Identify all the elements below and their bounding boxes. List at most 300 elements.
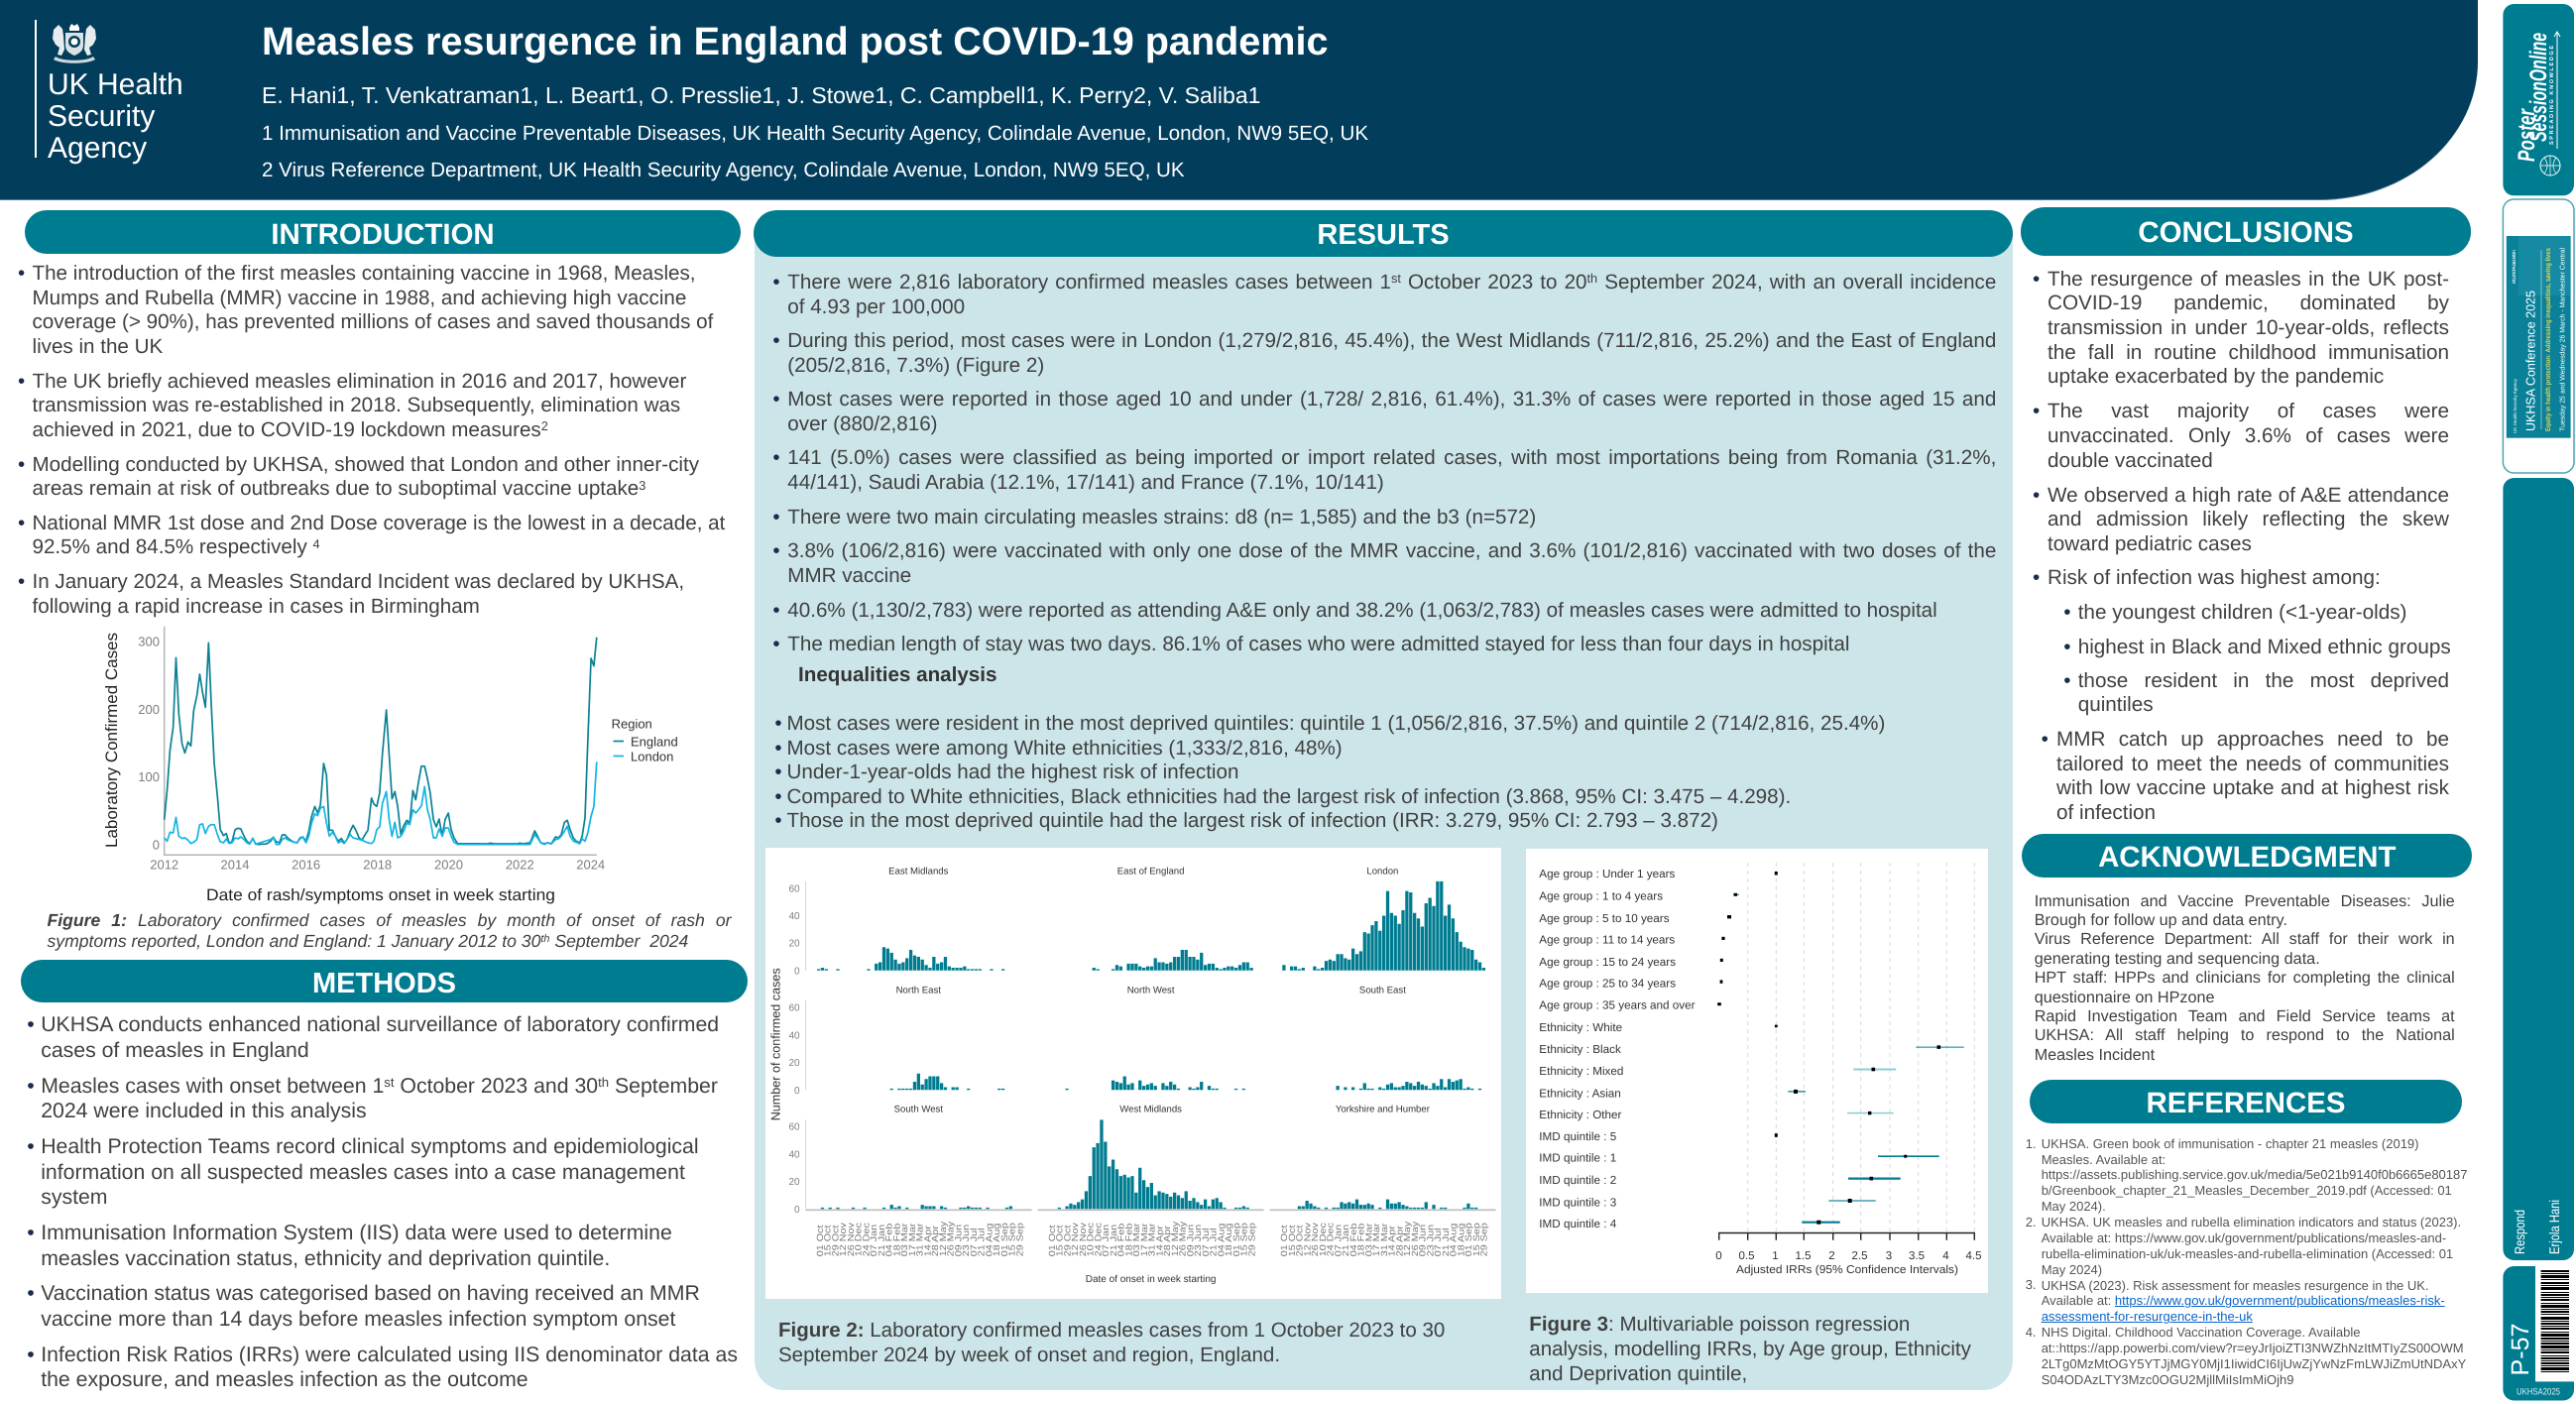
- x axis ticks: 2024: [576, 857, 605, 873]
- row labels: Ethnicity : Black: [1539, 1043, 1621, 1056]
- facet titles: North West: [1127, 985, 1175, 995]
- y axis ticks: 0: [794, 966, 800, 977]
- row labels: IMD quintile : 4: [1539, 1218, 1617, 1230]
- text: introduction bullet 2: achieved in 2021, due to COVID-19 lockdown measures2: [32, 418, 548, 441]
- text: conclusions bullet 1: uptake exacerbated by the pandemic: [2048, 365, 2384, 388]
- chart: figure 1 line chart: [102, 627, 678, 904]
- x axis labels: column 2: 01 Sep: [1231, 1223, 1241, 1256]
- text: results bullet 3: over (880/2,816): [787, 412, 938, 435]
- text: methods bullet 6: the exposure, and measles infection as the outcome: [41, 1367, 528, 1391]
- text: conclusions sub-bullet 3: quintiles: [2078, 693, 2154, 716]
- facet titles: South West: [894, 1104, 944, 1114]
- text: conclusions bullet 2: The vast majority of cases were: [2048, 400, 2449, 422]
- line series: England and London: [165, 638, 597, 845]
- panel: results: •: [774, 785, 782, 808]
- x axis labels: column 2: 07 Jul: [1201, 1228, 1211, 1256]
- panel: results: •: [772, 633, 780, 655]
- x axis labels: column 3: 26 May: [1410, 1221, 1420, 1256]
- confidence intervals: [1733, 894, 1964, 1223]
- panel: poster id and barcode: [2503, 1266, 2574, 1400]
- x axis labels: column 2: 04 Aug: [1217, 1223, 1227, 1256]
- figure 2 caption: Figure 2: Laboratory confirmed measles cases from 1 October 2023 to 30: [778, 1319, 1445, 1342]
- y axis ticks: 40: [789, 1149, 800, 1160]
- text: acknowledgment: HPT staff: HPPs and clinicians for completing the clinical: [2035, 969, 2455, 987]
- panel: presenter strip: [2503, 478, 2574, 1260]
- heading: conclusions: CONCLUSIONS: [2138, 216, 2354, 249]
- x axis labels: column 3: 07 Jul: [1433, 1228, 1443, 1256]
- x axis tick labels: 1.5: [1795, 1250, 1811, 1262]
- text: acknowledgment: generating testing and sequencing data.: [2035, 950, 2320, 968]
- text: methods bullet 5: vaccine more than 14 days before measles infection symptom onset: [41, 1307, 675, 1331]
- text: conclusions sub-bullet 2: highest in Black and Mixed ethnic groups: [2078, 635, 2451, 658]
- panel: results: [754, 210, 2013, 1390]
- text: methods bullet 5: [27, 1281, 700, 1331]
- x axis labels: column 2: 18 Feb: [1124, 1223, 1134, 1256]
- text: methods bullet 3: Health Protection Teams record clinical symptoms and epidemiological: [41, 1134, 699, 1158]
- x axis labels: column 2: 15 Sep: [1239, 1223, 1249, 1256]
- text: reference numbers: 1.: [2026, 1136, 2037, 1151]
- x axis labels: column 2: 29 Oct: [1063, 1225, 1073, 1256]
- text: conclusions bullet 5: [2042, 728, 2449, 824]
- panel: introduction: •: [18, 370, 25, 393]
- y axis ticks: 20: [789, 1177, 800, 1188]
- y axis ticks: [138, 635, 160, 853]
- figure 3 caption: analysis, modelling IRRs, by Age group, Ethnicity: [1529, 1338, 1971, 1360]
- x axis labels: column 3: 23 Jun: [1426, 1225, 1436, 1256]
- facet titles: East of England: [1117, 866, 1185, 877]
- x axis labels: column 1: 01 Oct: [815, 1225, 825, 1256]
- text: methods bullet 1: cases of measles in England: [41, 1038, 309, 1062]
- x axis ticks: 2018: [363, 857, 392, 873]
- text: introduction bullet 1: The introduction of the first measles containing vaccine in 1968, Measles,: [32, 262, 696, 285]
- row labels: Ethnicity : Asian: [1539, 1087, 1621, 1101]
- text: results bullet 8: The median length of stay was two days. 86.1% of cases who were admitted stayed for less than four days in hospital: [787, 633, 1849, 655]
- x axis labels: column 2: 31 Mar: [1147, 1223, 1157, 1256]
- x axis labels: column 1: 04 Aug: [985, 1223, 995, 1256]
- affiliation 1: 1 Immunisation and Vaccine Preventable Diseases, UK Health Security Agency, Colindale Avenue, London, NW9 5EQ, UK: [262, 121, 1368, 145]
- panel: poster id and barcode: P-57: [2507, 1323, 2534, 1376]
- x axis labels: column 3: 29 Oct: [1295, 1225, 1305, 1256]
- x axis labels: column 2: 04 Feb: [1116, 1223, 1126, 1256]
- affiliation 2: 2 Virus Reference Department, UK Health Security Agency, Colindale Avenue, London, NW9 5EQ, UK: [262, 159, 1185, 180]
- panel: results: •: [774, 737, 782, 760]
- x axis labels: column 3: 17 Mar: [1371, 1223, 1381, 1256]
- text: results bullet 4: 141 (5.0%) cases were classified as being imported or import related cases, with most importations being from Romania (31.2%,: [787, 446, 1996, 469]
- row labels: Age group : 5 to 10 years: [1539, 912, 1670, 925]
- facet titles: East Midlands: [889, 866, 949, 877]
- panel: results: •: [774, 712, 782, 735]
- panel: methods: •: [27, 1134, 35, 1158]
- text: methods bullet 2: 2024 were included in this analysis: [41, 1099, 367, 1122]
- text: references list: b/Greenbook_chapter_21_Measles_December_2019.pdf (Accessed: 01: [2042, 1183, 2452, 1198]
- row labels: Age group : 15 to 24 years: [1539, 956, 1676, 969]
- text: inequalities bullets: Most cases were among White ethnicities (1,333/2,816, 48%): [787, 737, 1343, 760]
- text: introduction bullet 5: In January 2024, a Measles Standard Incident was declared by UKHSA,: [32, 570, 684, 593]
- panel: results: •: [772, 446, 780, 469]
- row labels: Ethnicity : Mixed: [1539, 1065, 1623, 1078]
- x axis labels: column 1: 01 Sep: [999, 1223, 1009, 1256]
- facet titles: [889, 866, 1431, 1114]
- text: introduction bullet 3: Modelling conducted by UKHSA, showed that London and other inner-city: [32, 453, 699, 476]
- heading: introduction: INTRODUCTION: [271, 218, 495, 251]
- text: acknowledgment: Measles Incident: [2035, 1046, 2155, 1064]
- panel: conclusions: •: [2063, 635, 2071, 658]
- x axis ticks: 2020: [434, 857, 463, 873]
- text: references list: Available at: https://www.gov.uk/government/publications/measles-risk-: [2042, 1293, 2445, 1308]
- text: results bullet 4: [772, 446, 1996, 494]
- bars: North East: [892, 1073, 1003, 1090]
- text: acknowledgment: Rapid Investigation Team and Field Service teams at: [2035, 1007, 2455, 1025]
- text: results bullet 2: (205/2,816, 7.3%) (Figure 2): [787, 354, 1044, 377]
- y axis ticks: 40: [789, 911, 800, 922]
- panel: results: •: [772, 599, 780, 621]
- panel: methods: •: [27, 1343, 35, 1366]
- text: acknowledgment: Virus Reference Department: All staff for their work in: [2035, 930, 2455, 948]
- subheading: inequalities analysis: Inequalities analysis: [798, 663, 996, 686]
- text: reference numbers: 3.: [2026, 1277, 2037, 1292]
- y axis ticks: 20: [789, 1058, 800, 1069]
- x axis labels: column 3: 07 Jan: [1334, 1225, 1344, 1256]
- figure 2 caption: [778, 1319, 1445, 1366]
- text: results bullet 6: 3.8% (106/2,816) were vaccinated with only one dose of the MMR vaccine, and 3.6% (101/2,816) vaccinated with two doses of the: [787, 539, 1996, 562]
- text: results bullet 1: There were 2,816 laboratory confirmed measles cases between 1st October 2023 to 20th September 2024, with an overall incidence: [787, 271, 1996, 293]
- bars: West Midlands: [1060, 1119, 1248, 1209]
- x axis labels: column 1: 12 May: [938, 1221, 948, 1256]
- text: introduction bullet 2: [18, 370, 686, 441]
- x axis labels: column 2: 17 Mar: [1139, 1223, 1149, 1256]
- panel: Poster Session Online logo: [2503, 4, 2574, 195]
- x axis labels: column 1: 21 Jan: [877, 1225, 886, 1256]
- text: conclusions bullet 3: [2033, 484, 2449, 555]
- x axis labels: column 3: 04 Feb: [1348, 1223, 1358, 1256]
- logo: UK Health Security Agency: [35, 20, 195, 158]
- title: Measles resurgence in England post COVID-19 pandemic: [262, 20, 1329, 63]
- x axis labels: column 1: [815, 1221, 1025, 1256]
- row labels: Age group : 11 to 14 years: [1539, 934, 1675, 947]
- x axis title: Date of rash/symptoms onset in week starting: [206, 885, 555, 904]
- x axis labels: column 3: 03 Mar: [1364, 1223, 1374, 1256]
- text: results bullet 1: [772, 271, 1996, 318]
- text: introduction bullet 2: The UK briefly achieved measles elimination in 2016 and 2017, however: [32, 370, 686, 393]
- text: conclusions bullet 5: of infection: [2056, 801, 2156, 824]
- panel: results: •: [774, 760, 782, 783]
- text: conclusions bullet 5: MMR catch up approaches need to be: [2056, 728, 2449, 751]
- text: conclusions sub-bullet 3: those resident in the most deprived: [2078, 669, 2449, 692]
- text: conclusions bullet 4: Risk of infection was highest among:: [2048, 566, 2381, 589]
- x axis labels: column 2: 01 Oct: [1047, 1225, 1057, 1256]
- text: introduction bullet 4: National MMR 1st dose and 2nd Dose coverage is the lowest in a decade, at: [32, 512, 725, 534]
- text: introduction bullet 2: transmission was re-established in 2018. Subsequently, elimination was: [32, 394, 680, 416]
- panel: introduction: •: [18, 570, 25, 593]
- text: conclusions sub-bullet 1: the youngest children (<1-year-olds): [2078, 601, 2406, 624]
- x axis labels: column 2: 12 May: [1170, 1221, 1180, 1256]
- text: reference numbers: 2.: [2026, 1215, 2037, 1229]
- x axis tick labels: 4.5: [1965, 1250, 1981, 1262]
- row labels: IMD quintile : 2: [1539, 1174, 1616, 1187]
- panel: methods: •: [27, 1281, 35, 1305]
- panel: conclusions: •: [2063, 669, 2071, 692]
- x axis labels: column 1: 17 Mar: [907, 1223, 917, 1256]
- x axis labels: column 2: 03 Mar: [1132, 1223, 1142, 1256]
- panel: Poster Session Online logo: SPREADING KNOWLEDGE: [2549, 46, 2555, 145]
- text: methods bullet 3: [27, 1134, 699, 1209]
- text: introduction bullet 1: coverage (> 90%), has prevented millions of cases and saved thousands of: [32, 310, 713, 333]
- text: conclusions bullet 2: [2033, 400, 2449, 472]
- x axis tick labels: 0.5: [1739, 1250, 1755, 1262]
- bars: South West: [823, 1205, 1011, 1209]
- facet titles: London: [1367, 866, 1399, 877]
- heading: methods: METHODS: [312, 968, 456, 999]
- text: methods bullet 1: UKHSA conducts enhanced national surveillance of laboratory confirmed: [41, 1012, 719, 1036]
- x axis labels: column 3: 18 Feb: [1356, 1223, 1366, 1256]
- text: results bullet 1: of 4.93 per 100,000: [787, 295, 965, 318]
- y axis ticks: 0: [794, 1204, 800, 1215]
- text: introduction bullet 3: [18, 453, 699, 500]
- legend: Region: [612, 716, 652, 732]
- x axis: [1719, 1233, 1974, 1240]
- x axis labels: column 1: 28 Apr: [931, 1226, 941, 1256]
- x axis labels: column 3: 01 Sep: [1464, 1223, 1473, 1256]
- panel: methods: •: [27, 1012, 35, 1036]
- chart: figure 3 forest plot: [1526, 849, 1988, 1293]
- x axis labels: column 2: 15 Oct: [1055, 1225, 1065, 1256]
- x axis labels: column 1: 14 Apr: [923, 1226, 933, 1256]
- text: reference numbers: [2026, 1136, 2040, 1341]
- bars: North West: [1067, 1076, 1244, 1090]
- panel: references: [2013, 1076, 2479, 1391]
- x axis labels: column 1: 29 Sep: [1015, 1223, 1025, 1256]
- logo wordmark: Agency: [48, 132, 147, 165]
- x axis labels: column 3: 04 Aug: [1449, 1223, 1459, 1256]
- text: methods bullet 2: Measles cases with onset between 1st October 2023 and 30th September: [41, 1074, 718, 1098]
- x axis labels: column 3: 12 Nov: [1303, 1222, 1313, 1256]
- legend: London: [631, 750, 673, 763]
- text: conclusions bullet 3: toward pediatric cases: [2048, 532, 2252, 555]
- text: results bullet 2: During this period, most cases were in London (1,279/2,816, 45.4%), the West Midlands (711/2,816, 25.2%) and the East of England: [787, 329, 1996, 352]
- x axis labels: column 3: 24 Dec: [1326, 1222, 1336, 1256]
- text: conclusions bullet 1: [2033, 268, 2449, 388]
- x axis tick labels: 3.5: [1909, 1250, 1925, 1262]
- panel: methods: •: [27, 1074, 35, 1098]
- text: conclusions bullet 5: with low vaccine uptake and at highest risk: [2056, 776, 2449, 799]
- chart: figure 2 regional bar charts: [765, 848, 1501, 1299]
- x axis tick labels: 3: [1886, 1250, 1892, 1262]
- logo wordmark: Security: [48, 100, 155, 133]
- panel: results: •: [772, 539, 780, 562]
- panel: presenter strip: Erjola Hani: [2546, 1200, 2562, 1254]
- text: methods bullet 4: Immunisation Information System (IIS) data were used to determine: [41, 1221, 672, 1244]
- text: conclusions bullet 1: The resurgence of measles in the UK post-: [2048, 268, 2449, 291]
- text: references list: rubella-elimination-uk/uk-measles-and-rubella-elimination (Accessed: 01: [2042, 1246, 2453, 1261]
- panel: methods: •: [27, 1221, 35, 1244]
- text: introduction bullet 1: lives in the UK: [32, 335, 163, 358]
- panel: conclusions: •: [2033, 566, 2040, 589]
- text: methods bullet 6: [27, 1343, 738, 1391]
- heading: acknowledgment: [2022, 834, 2472, 878]
- x axis labels: column 3: 21 Jul: [1441, 1228, 1451, 1256]
- x axis labels: column 3: 01 Oct: [1279, 1225, 1289, 1256]
- x axis labels: column 1: 23 Jun: [962, 1225, 972, 1256]
- x axis labels: column 2: 29 Sep: [1247, 1223, 1257, 1256]
- panel: UKHSA Conference 2025 banner: UKHSA Conference 2025: [2524, 291, 2538, 431]
- x axis labels: column 2: 26 May: [1178, 1221, 1188, 1256]
- panel: results: •: [772, 506, 780, 527]
- row labels: Age group : 25 to 34 years: [1539, 977, 1676, 990]
- x axis labels: column 2: 10 Dec: [1086, 1222, 1096, 1256]
- row labels: Age group : 35 years and over: [1539, 999, 1696, 1012]
- x axis labels: column 1: 21 Jul: [977, 1228, 987, 1256]
- authors: E. Hani1, T. Venkatraman1, L. Beart1, O. Presslie1, J. Stowe1, C. Campbell1, K. Perry2, V. Saliba1: [262, 82, 1260, 108]
- facet titles: Yorkshire and Humber: [1336, 1104, 1431, 1114]
- text: methods bullet 2: [27, 1074, 718, 1122]
- panel: results: •: [772, 329, 780, 352]
- text: references list: May 2024).: [2042, 1199, 2106, 1214]
- x axis labels: column 3: 26 Nov: [1310, 1222, 1320, 1256]
- x axis labels: column 3: 14 Apr: [1387, 1226, 1397, 1256]
- panel: conclusions: •: [2033, 400, 2040, 422]
- sidebar: poster session strip: [2499, 0, 2576, 1404]
- heading: results: RESULTS: [1317, 219, 1450, 251]
- facet titles: North East: [896, 985, 942, 995]
- header banner: [0, 0, 2478, 200]
- x axis title: Date of onset in week starting: [1086, 1273, 1217, 1284]
- heading: introduction: [25, 210, 741, 254]
- x axis labels: column 2: 18 Aug: [1225, 1223, 1234, 1256]
- text: references list: NHS Digital. Childhood Vaccination Coverage. Available: [2042, 1325, 2361, 1340]
- text: references list: Available at: https://www.gov.uk/government/publications/measles-and-: [2042, 1230, 2446, 1245]
- panel: UKHSA Conference 2025 banner: UK Health Security Agency: [2513, 378, 2517, 433]
- text: introduction bullet 5: following a rapid increase in cases in Birmingham: [32, 595, 480, 618]
- y axis ticks: 200: [138, 702, 160, 717]
- text: references list: assessment-for-resurgence-in-the-uk: [2042, 1309, 2253, 1324]
- x axis tick labels: 0: [1715, 1250, 1722, 1262]
- text: introduction bullet 4: 92.5% and 84.5% respectively 4: [32, 535, 320, 558]
- y axis ticks: 60: [789, 883, 800, 894]
- y axis ticks: 60: [789, 1002, 800, 1013]
- x axis labels: column 2: 09 Jun: [1186, 1225, 1196, 1256]
- x axis labels: column 3: [1279, 1221, 1489, 1256]
- row labels: IMD quintile : 1: [1539, 1152, 1616, 1164]
- x axis labels: column 1: 29 Oct: [831, 1225, 841, 1256]
- x axis ticks: 2016: [292, 857, 320, 873]
- text: results bullet 3: Most cases were reported in those aged 10 and under (1,728/ 2,816, 61.4%), 31.3% of cases were reported in those aged 15 and: [787, 388, 1996, 410]
- row labels: Ethnicity : White: [1539, 1021, 1622, 1034]
- figure 1 caption: symptoms reported, London and England: 1 January 2012 to 30th September 2024: [48, 930, 688, 950]
- x axis ticks: [150, 857, 605, 873]
- panel: UKHSA Conference 2025 banner: [2503, 199, 2574, 473]
- text: references list: May 2024): [2042, 1262, 2102, 1277]
- text: references list: S04ODAzLTY3Mzc0OGU2MjllMiIsImMiOjh9: [2042, 1372, 2293, 1387]
- x axis labels: column 2: 12 Nov: [1071, 1222, 1081, 1256]
- heading: results: [754, 210, 2013, 257]
- text: results bullet 4: 44/141), Saudi Arabia (12.1%, 17/141) and France (7.1%, 10/141): [787, 471, 1384, 494]
- text: references list: [2042, 1136, 2467, 1388]
- x axis tick labels: [1715, 1250, 1981, 1262]
- text: conclusions bullet 1: COVID-19 pandemic, dominated by: [2048, 292, 2449, 314]
- text: results bullet 7: 40.6% (1,130/2,783) were reported as attending A&E only and 38.2% (1,063/2,783) of measles cases were admitted to hospital: [787, 599, 1937, 621]
- figure 3 caption: Figure 3: Multivariable poisson regression: [1529, 1313, 1910, 1336]
- x axis labels: column 3: 28 Apr: [1395, 1226, 1405, 1256]
- row labels: IMD quintile : 5: [1539, 1130, 1617, 1143]
- facet titles: West Midlands: [1120, 1104, 1183, 1114]
- text: introduction bullet 1: [18, 262, 714, 358]
- x axis labels: column 1: 18 Aug: [993, 1223, 1002, 1256]
- text: conclusions bullet 5: tailored to meet the needs of communities: [2056, 753, 2449, 775]
- legend: [612, 716, 678, 763]
- x axis labels: column 2: 21 Jul: [1209, 1228, 1219, 1256]
- panel: introduction: •: [18, 262, 25, 285]
- x axis labels: column 3: 12 May: [1402, 1221, 1412, 1256]
- facet titles: South East: [1359, 985, 1407, 995]
- text: methods bullet 3: system: [41, 1185, 107, 1209]
- x axis labels: column 2: 21 Jan: [1109, 1225, 1118, 1256]
- text: references list: https://assets.publishing.service.gov.uk/media/5e021b9140f0b6665e80187: [2042, 1167, 2467, 1182]
- panel: results: •: [772, 388, 780, 410]
- text: introduction bullet 4: [18, 512, 726, 558]
- x axis labels: column 3: 10 Dec: [1318, 1222, 1328, 1256]
- x axis labels: column 1: 24 Dec: [862, 1222, 872, 1256]
- x axis labels: column 1: 26 Nov: [846, 1222, 856, 1256]
- text: references list: UKHSA. UK measles and rubella elimination indicators and status (2023).: [2042, 1215, 2461, 1229]
- x axis labels: column 2: 07 Jan: [1102, 1225, 1112, 1256]
- bars: East Midlands: [819, 947, 1003, 970]
- panel: introduction: •: [18, 453, 25, 476]
- x axis tick labels: 2.5: [1852, 1250, 1868, 1262]
- text: conclusions bullet 1: transmission in under 10-year-olds, reflects: [2048, 316, 2449, 339]
- y axis title: Number of confirmed cases: [769, 968, 783, 1120]
- text: introduction bullet 1: Mumps and Rubella (MMR) vaccine in 1988, and achieving high vaccine: [32, 287, 686, 309]
- text: inequalities bullets: Most cases were resident in the most deprived quintiles: quintile 1 (1,056/2,816, 37.5%) and quintile 2 (714/2,816, 25.4%): [787, 712, 1885, 735]
- x axis labels: column 1: 04 Feb: [884, 1223, 894, 1256]
- heading: references: REFERENCES: [2147, 1087, 2345, 1119]
- heading: conclusions: [2021, 207, 2471, 256]
- text: methods bullet 5: Vaccination status was categorised based on having received an MMR: [41, 1281, 700, 1305]
- text: references list: UKHSA (2023). Risk assessment for measles resurgence in the UK.: [2042, 1278, 2429, 1293]
- panel: methods: [21, 960, 748, 1391]
- bars: Yorkshire and Humber: [1300, 1199, 1476, 1209]
- y axis ticks: 0: [153, 837, 160, 853]
- text: methods bullet 4: [27, 1221, 672, 1270]
- panel: presenter strip: Respond: [2512, 1210, 2527, 1254]
- panel: UKHSA Conference 2025 banner: Equity in health protection: Addressing inequalities, saving lives: [2544, 248, 2552, 431]
- text: acknowledgment: UKHSA: All staff helping to respond to the National: [2035, 1026, 2455, 1044]
- x axis labels: column 1: 15 Sep: [1007, 1223, 1017, 1256]
- text: acknowledgment: questionnaire on HPzone: [2035, 989, 2214, 1006]
- text: inequalities bullets: [774, 712, 1885, 832]
- x axis labels: column 1: 12 Nov: [839, 1222, 849, 1256]
- panel: poster id and barcode: UKHSA2025: [2517, 1386, 2560, 1398]
- row labels: Age group : 1 to 4 years: [1539, 890, 1663, 903]
- text: conclusions bullet 1: the fall in routine childhood immunisation: [2048, 341, 2449, 364]
- x axis tick labels: 2: [1828, 1250, 1835, 1262]
- x axis tick labels: 1: [1772, 1250, 1779, 1262]
- x axis labels: column 1: 31 Mar: [915, 1223, 925, 1256]
- text: conclusions bullet 3: and admission likely reflecting the skew: [2048, 508, 2449, 530]
- bars: South East: [1339, 1079, 1480, 1090]
- panel: conclusions: •: [2033, 484, 2040, 506]
- x axis labels: column 2: 14 Apr: [1155, 1226, 1165, 1256]
- text: conclusions bullet 2: double vaccinated: [2048, 449, 2213, 472]
- panel: conclusions: [2021, 207, 2471, 824]
- y axis ticks: 20: [789, 938, 800, 949]
- x axis tick labels: 4: [1942, 1250, 1949, 1262]
- text: conclusions bullet 3: We observed a high rate of A&E attendance: [2048, 484, 2449, 506]
- x axis labels: column 1: 07 Jul: [969, 1228, 979, 1256]
- bars: London: [1284, 881, 1484, 970]
- heading: methods: [21, 960, 748, 1002]
- panel: conclusions: •: [2033, 268, 2040, 291]
- bars: East of England: [1095, 950, 1251, 970]
